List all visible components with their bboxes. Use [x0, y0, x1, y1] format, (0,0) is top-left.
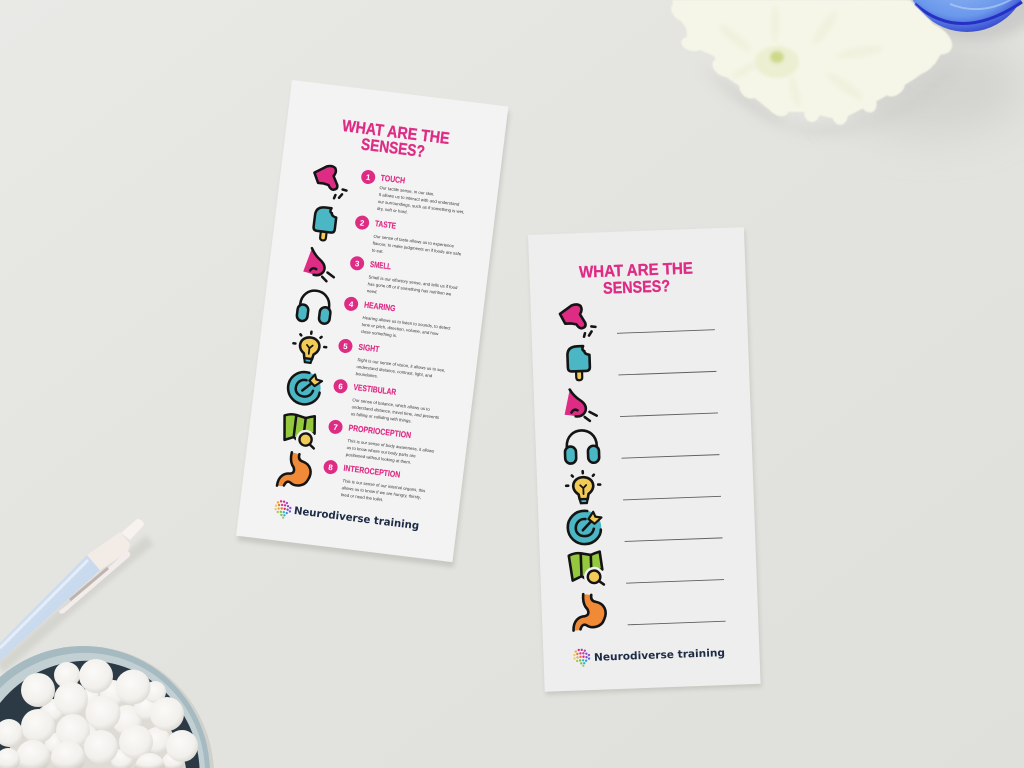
sense 2: taste: TASTE	[375, 218, 397, 231]
sense 4: hearing: Hearing allows us to listen to sounds, to detect	[362, 315, 452, 331]
sense 6: vestibular: understand distance, travel time, and prevents	[351, 404, 439, 420]
sense 2: taste	[352, 215, 465, 263]
photo prop: bowl of white balls	[0, 646, 214, 768]
panel: filled-in senses card	[235, 80, 510, 567]
sense 1: touch: Our tactile sense, in our skin.	[379, 185, 435, 197]
icon: smell	[564, 389, 597, 422]
sense 7: proprioception: 7	[333, 423, 339, 432]
icon: taste	[567, 346, 590, 381]
heading: WHAT ARE THE	[341, 117, 451, 148]
sense 8: interoception: This is our sense of our internal organs, this	[342, 478, 426, 493]
sense 3: smell: need.	[367, 288, 378, 294]
icon: vestibular	[567, 510, 602, 545]
heading	[339, 117, 451, 164]
sense 2: taste: 2	[359, 218, 365, 228]
icon: vestibular	[286, 370, 323, 406]
sense 8: interoception: 8	[328, 463, 334, 472]
sense 5: sight: 5	[343, 342, 349, 351]
sense 8: interoception: INTEROCEPTION	[343, 463, 401, 480]
sense 1: touch: our surroundings, such as if something is wet,	[378, 199, 465, 214]
sense 1: touch: 1	[365, 173, 371, 182]
sense 6: vestibular: 6	[338, 382, 344, 391]
soft shadow beneath flower and glass	[835, 35, 1024, 135]
icon: hearing	[564, 430, 599, 464]
photo prop: blue glass	[910, 0, 1024, 42]
sense 4: hearing	[341, 296, 454, 345]
sense 7: proprioception: PROPRIOCEPTION	[348, 423, 412, 440]
sense 1: touch: TOUCH	[380, 173, 406, 185]
icon: touch	[312, 164, 349, 200]
sense 6: vestibular: VESTIBULAR	[353, 382, 397, 397]
sense 3: smell: has gone off or if something has nutrition we	[367, 281, 452, 297]
logo: Neurodiverse training	[573, 643, 725, 667]
sense 7: proprioception	[325, 419, 437, 467]
sense 5: sight	[335, 338, 448, 387]
sense 8: interoception: tired or need the toilet.	[341, 492, 384, 502]
sense 3: smell	[347, 256, 460, 304]
sense 5: sight: understand distance, contrast, light, and	[356, 364, 433, 378]
sense 5: sight: boundaries.	[355, 371, 378, 379]
photo prop: white chrysanthemum flower	[671, 0, 952, 125]
icon: proprioception	[569, 551, 604, 588]
sense 1: touch	[357, 169, 468, 221]
sense 2: taste: flavour, to make judgments on if foods are safe	[372, 241, 462, 256]
sense 8: interoception	[320, 459, 428, 507]
logo: Neurodiverse training	[273, 499, 420, 535]
sense 2: taste: Our sense of taste allows us to experience	[373, 234, 455, 249]
sense 6: vestibular	[330, 378, 442, 427]
icon: smell	[302, 247, 337, 282]
sense 6: vestibular: us falling or colliding with things.	[350, 411, 412, 424]
sense 7: proprioception: us to know where our body parts are	[346, 445, 417, 458]
panel: blank worksheet card	[528, 227, 762, 695]
sense 3: smell: Smell is our olfactory sense, and tells us if food	[368, 274, 458, 290]
sense 5: sight: Sight is our sense of vision, it allows us to see,	[357, 357, 446, 373]
icon: hearing	[296, 289, 333, 324]
sense 7: proprioception: positioned without looking at them.	[345, 452, 412, 465]
logo: Neurodiverse training: Neurodiverse training	[594, 647, 725, 664]
sense 3: smell: 3	[354, 259, 360, 269]
sense 1: touch: It allows us to interact with and understand	[378, 192, 460, 207]
sense 5: sight: SIGHT	[358, 342, 381, 354]
icon: sight	[566, 471, 601, 504]
heading: SENSES?	[603, 277, 670, 298]
sense 4: hearing: close something is.	[361, 329, 397, 338]
sense 7: proprioception: This is our sense of body awareness, it allows	[347, 438, 435, 454]
heading: WHAT ARE THE	[579, 259, 693, 282]
icon: taste	[312, 206, 337, 242]
sense 4: hearing: HEARING	[364, 300, 396, 313]
sense 4: hearing: 4	[348, 300, 354, 309]
icon: proprioception	[281, 413, 318, 450]
icon: interoception	[572, 593, 606, 631]
heading: SENSES?	[360, 135, 426, 161]
sense 6: vestibular: Our sense of balance, which allows us to	[352, 397, 431, 412]
answer lines	[617, 330, 726, 625]
sense 3: smell: SMELL	[370, 259, 392, 271]
photo prop: pale blue pen	[0, 519, 152, 670]
sense 8: interoception: allows us to know if we are hungry, thirsty,	[341, 485, 421, 500]
icon: touch	[560, 304, 596, 338]
logo: Neurodiverse training: Neurodiverse training	[293, 505, 420, 532]
icon: sight	[291, 330, 328, 365]
heading	[579, 259, 694, 299]
sense 1: touch: dry, soft or hard.	[377, 206, 408, 215]
sense 4: hearing: tone or pitch, direction, volume, and how	[361, 322, 440, 336]
sense 2: taste: to eat.	[372, 248, 384, 254]
icon: interoception	[277, 451, 313, 490]
